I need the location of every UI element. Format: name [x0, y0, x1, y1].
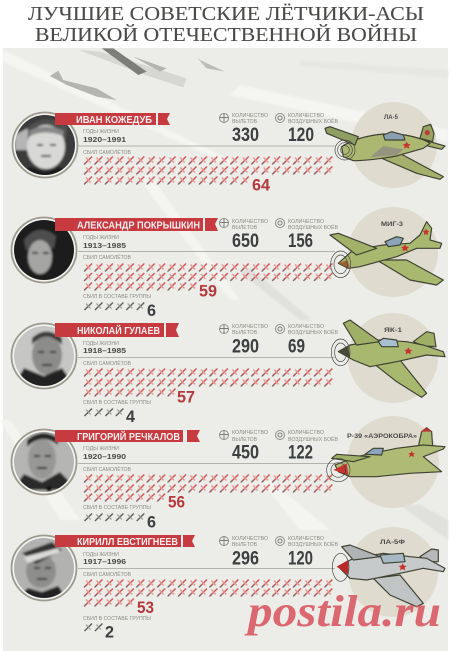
name banner: КИРИЛЛ ЕВСТИГНЕЕВ	[77, 536, 178, 548]
air battles stat: КОЛИЧЕСТВО	[288, 430, 324, 436]
row: Кирилл Евстигнеев	[10, 527, 445, 642]
name banner: АЛЕКСАНДР ПОКРЫШКИН	[77, 220, 200, 232]
name banner: НИКОЛАЙ ГУЛАЕВ	[77, 324, 160, 337]
air battles stat: КОЛИЧЕСТВО	[288, 324, 324, 330]
air battles stat: ВОЗДУШНЫХ БОЁВ	[288, 224, 339, 231]
sorties stat	[220, 218, 268, 252]
plane: Р-39 Аэрокобра	[327, 416, 445, 508]
years of life: 1918–1985	[83, 346, 126, 355]
years of life: 1913–1985	[83, 241, 126, 250]
sorties stat: КОЛИЧЕСТВО	[232, 219, 268, 225]
sorties stat: 650	[232, 231, 259, 252]
downed planes: СБИЛ САМОЛЁТОВ	[83, 254, 132, 261]
group kills	[83, 400, 152, 426]
sorties stat: КОЛИЧЕСТВО	[232, 324, 268, 330]
downed planes	[83, 360, 334, 406]
name banner: ГРИГОРИЙ РЕЧКАЛОВ	[77, 430, 180, 443]
downed planes	[83, 149, 334, 194]
years of life: ГОДЫ ЖИЗНИ	[83, 129, 119, 135]
group kills: СБИЛ В СОСТАВЕ ГРУППЫ	[83, 616, 152, 622]
name banner: ИВАН КОЖЕДУБ	[76, 114, 152, 126]
sorties stat	[220, 430, 268, 464]
group kills: 6	[147, 301, 156, 320]
air battles stat	[276, 113, 339, 146]
sorties stat: 330	[232, 125, 259, 146]
group kills	[83, 616, 152, 642]
sorties stat	[220, 324, 268, 358]
downed planes	[83, 466, 334, 512]
group kills: 6	[147, 512, 156, 532]
name banner	[55, 113, 170, 126]
air battles stat: ВОЗДУШНЫХ БОЁВ	[288, 541, 339, 548]
air battles stat	[276, 430, 339, 464]
plane: Ла-5Ф	[332, 527, 445, 617]
row: Александр Покрышкин	[10, 207, 443, 320]
years of life: 1917–1996	[83, 557, 126, 566]
sorties stat: КОЛИЧЕСТВО	[232, 113, 268, 119]
sorties stat: ВЫЛЕТОВ	[232, 119, 258, 125]
downed planes: 64	[252, 176, 271, 194]
air battles stat: 120	[288, 548, 313, 570]
group kills	[83, 505, 156, 532]
years of life: ГОДЫ ЖИЗНИ	[83, 235, 119, 241]
sorties stat	[220, 536, 268, 570]
portrait	[10, 428, 80, 498]
years of life: ГОДЫ ЖИЗНИ	[83, 341, 119, 347]
portrait	[10, 320, 80, 390]
air battles stat: ВОЗДУШНЫХ БОЁВ	[288, 118, 339, 125]
air battles stat: КОЛИЧЕСТВО	[288, 536, 324, 542]
sorties stat: КОЛИЧЕСТВО	[232, 536, 268, 542]
row: Николай Гулаев	[10, 313, 445, 426]
years of life	[83, 552, 126, 566]
downed planes: 59	[199, 282, 217, 300]
air battles stat: КОЛИЧЕСТВО	[288, 219, 324, 225]
group kills: 2	[105, 622, 114, 642]
plane: Ла-5	[325, 102, 445, 188]
sorties stat: КОЛИЧЕСТВО	[232, 430, 268, 436]
icon: grey planes in the sky	[50, 48, 225, 100]
sorties stat: 296	[232, 548, 259, 570]
downed planes	[83, 571, 334, 617]
air battles stat	[276, 218, 339, 252]
group kills: СБИЛ В СОСТАВЕ ГРУППЫ	[83, 400, 152, 406]
group kills	[83, 294, 156, 320]
group kills: СБИЛ В СОСТАВЕ ГРУППЫ	[83, 294, 152, 300]
air battles stat: 156	[288, 231, 313, 252]
sorties stat: 290	[232, 336, 259, 358]
air battles stat	[276, 536, 339, 570]
plane: Ла-5: ЛА-5	[384, 115, 399, 121]
plane: Як-1	[331, 313, 445, 403]
title	[28, 2, 424, 46]
air battles stat: ВОЗДУШНЫХ БОЁВ	[288, 436, 339, 443]
downed planes: 53	[137, 598, 154, 617]
years of life	[83, 129, 126, 144]
sorties stat: 450	[232, 442, 259, 464]
portrait	[10, 534, 80, 604]
air battles stat: КОЛИЧЕСТВО	[288, 113, 324, 119]
plane: Як-1: ЯК-1	[384, 328, 403, 334]
downed planes: 56	[168, 492, 185, 512]
air battles stat	[276, 324, 339, 358]
years of life: 1920–1990	[83, 452, 126, 461]
group kills: 4	[126, 407, 136, 426]
row: Иван Кожедуб	[10, 102, 445, 194]
portrait	[10, 215, 80, 285]
watermark: postila.ru: postila.ru	[244, 587, 441, 636]
air battles stat: 122	[288, 442, 313, 464]
years of life	[83, 341, 126, 355]
years of life: 1920–1991	[83, 135, 126, 144]
downed planes: 57	[177, 388, 195, 406]
downed planes	[83, 254, 334, 300]
downed planes: СБИЛ САМОЛЁТОВ	[83, 571, 132, 578]
downed planes: СБИЛ САМОЛЁТОВ	[83, 360, 132, 367]
plane: Ла-5Ф: ЛА-5Ф	[380, 540, 405, 546]
sorties stat: ВЫЛЕТОВ	[232, 437, 258, 443]
air battles stat: ВОЗДУШНЫХ БОЁВ	[288, 329, 339, 336]
sorties stat: ВЫЛЕТОВ	[232, 542, 258, 548]
years of life	[83, 446, 126, 461]
years of life: ГОДЫ ЖИЗНИ	[83, 552, 119, 558]
years of life	[83, 235, 126, 250]
plane: МиГ-3	[330, 207, 443, 297]
group kills: СБИЛ В СОСТАВЕ ГРУППЫ	[83, 505, 152, 511]
portrait	[10, 110, 80, 180]
sorties stat	[220, 113, 268, 146]
title: ЛУЧШИЕ СОВЕТСКИЕ ЛЁТЧИКИ-АСЫ	[28, 2, 424, 25]
name banner	[55, 323, 179, 337]
air battles stat: 69	[288, 336, 305, 358]
sorties stat: ВЫЛЕТОВ	[232, 225, 258, 231]
sorties stat: ВЫЛЕТОВ	[232, 330, 258, 336]
plane: Р-39 Аэрокобра: Р-39 «АЭРОКОБРА»	[347, 434, 418, 440]
years of life: ГОДЫ ЖИЗНИ	[83, 446, 119, 452]
downed planes: СБИЛ САМОЛЁТОВ	[83, 149, 132, 156]
air battles stat: 120	[288, 125, 314, 146]
plane: МиГ-3: МИГ-3	[381, 222, 404, 228]
title: ВЕЛИКОЙ ОТЕЧЕСТВЕННОЙ ВОЙНЫ	[35, 23, 417, 46]
row: Григорий Речкалов	[10, 416, 445, 532]
downed planes: СБИЛ САМОЛЁТОВ	[83, 466, 132, 473]
